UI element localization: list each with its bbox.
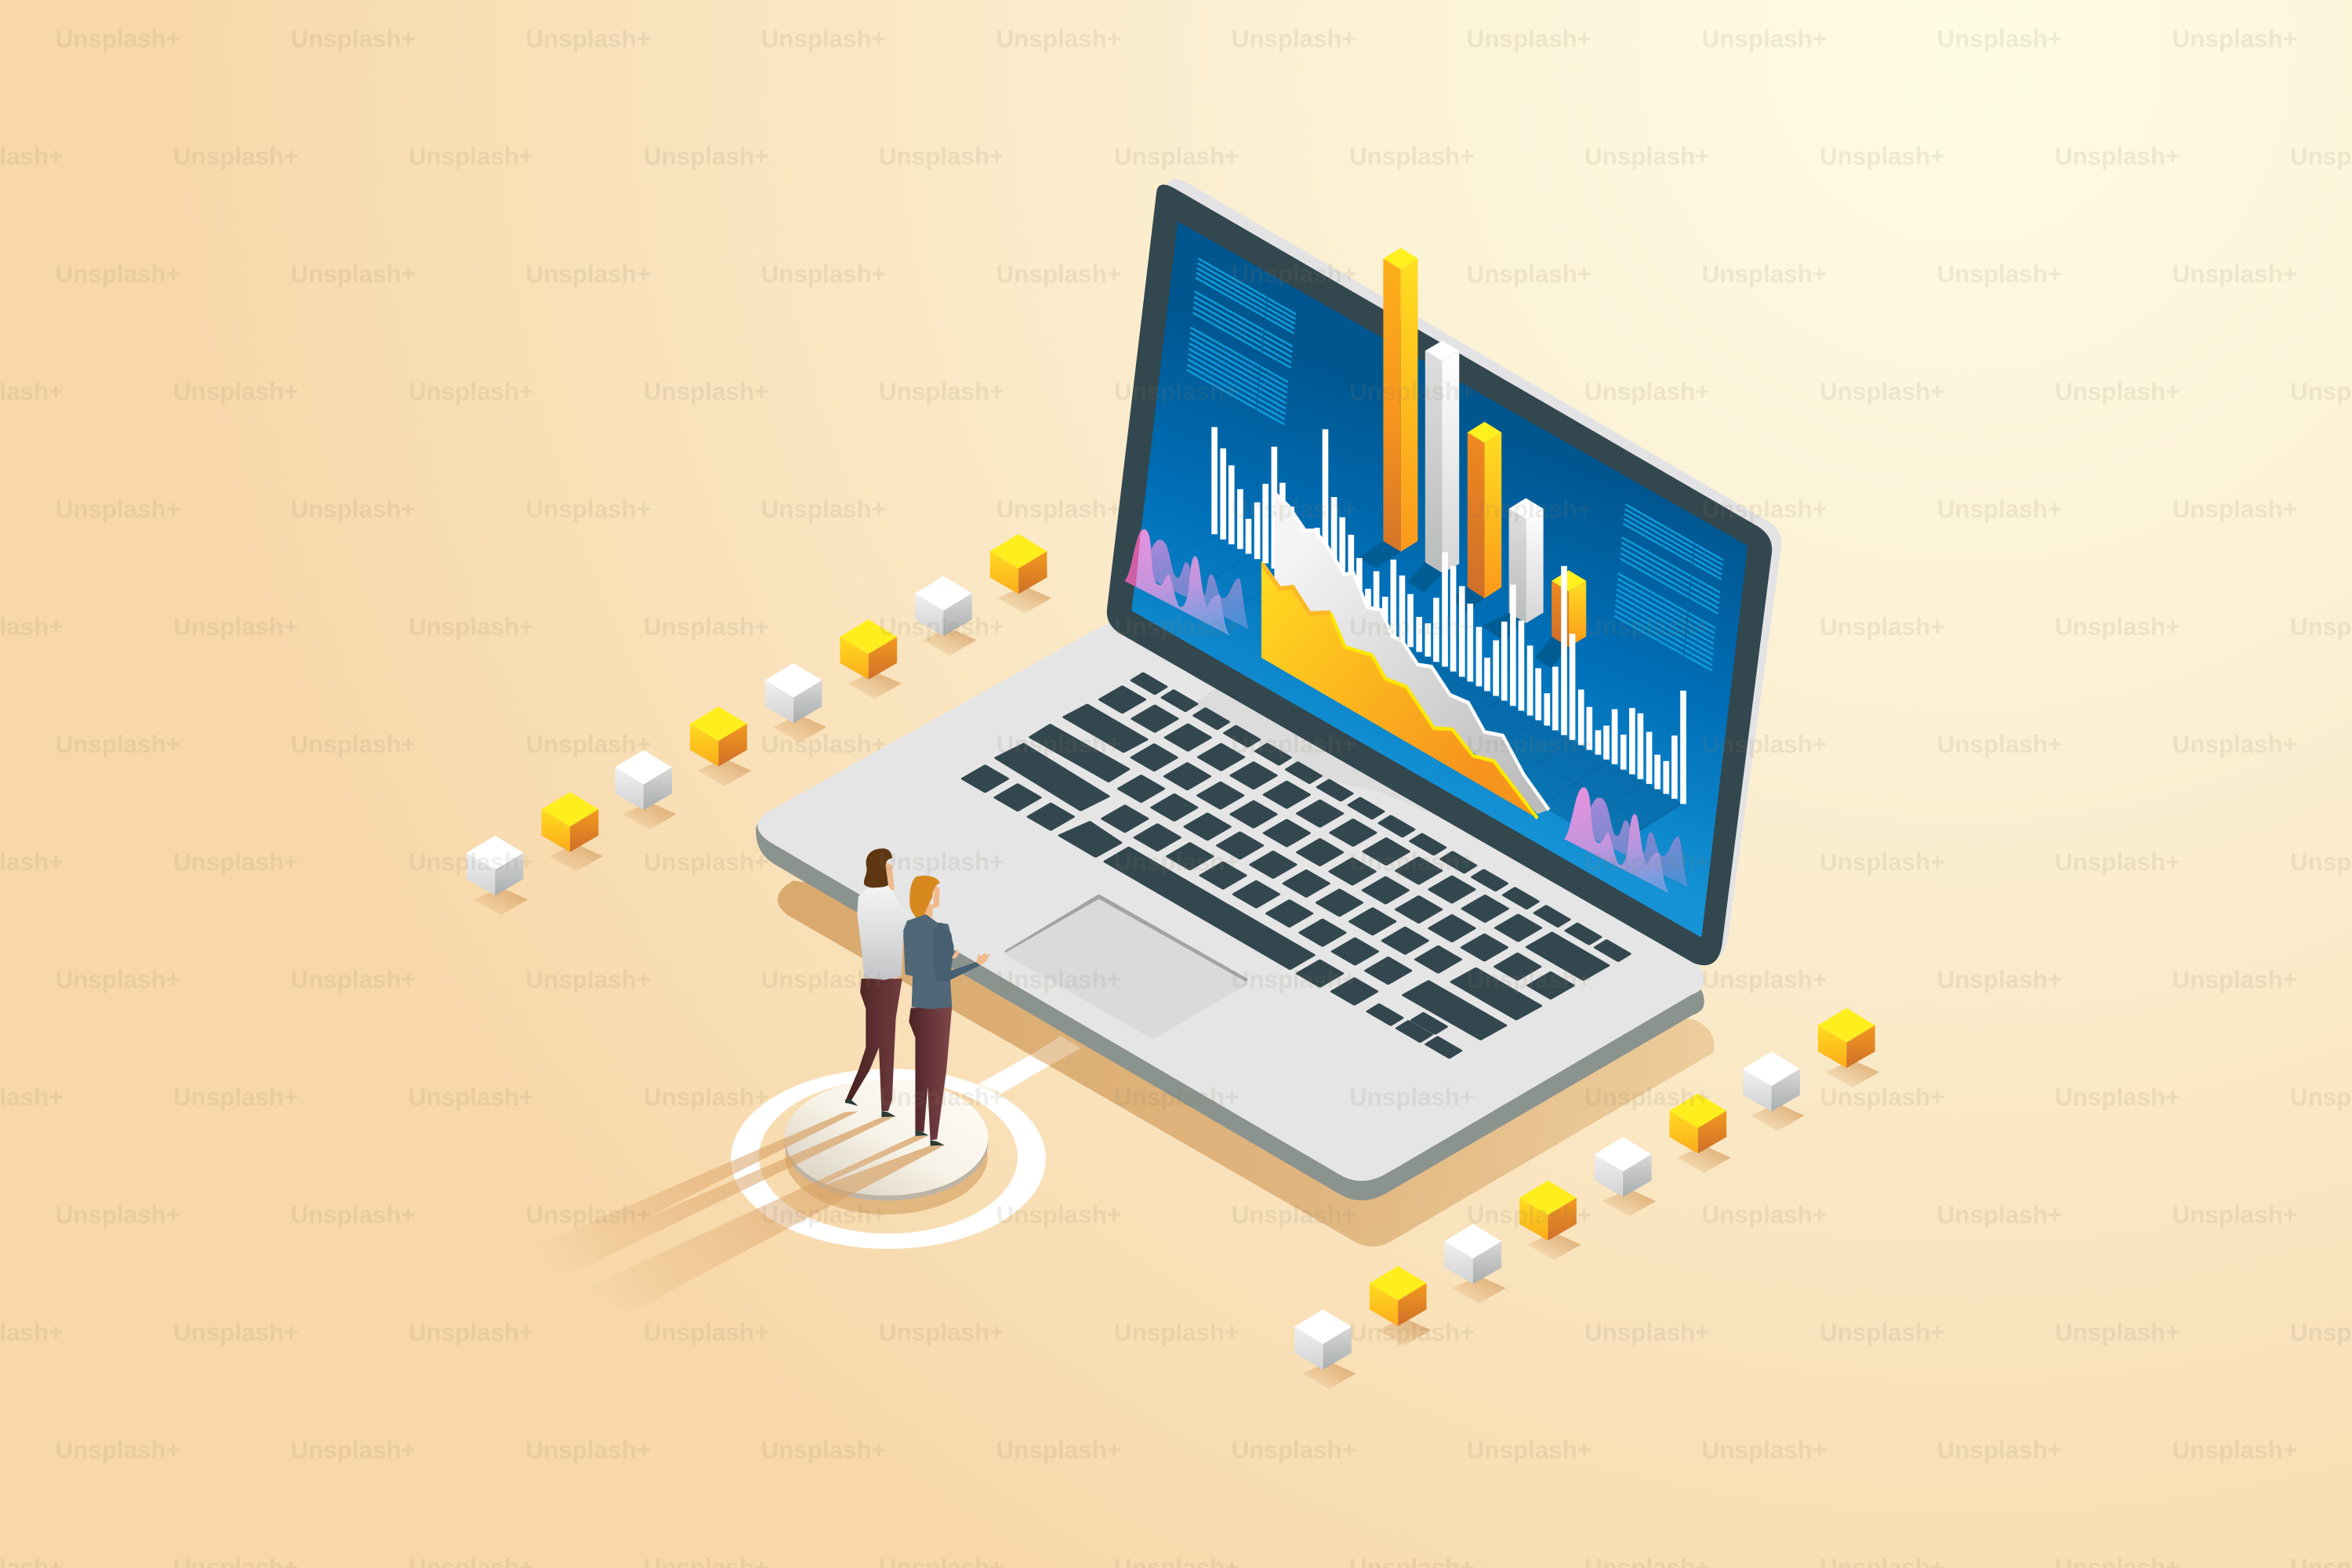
Unsplash+ watermark grid: Unsplash+ (2172, 495, 2297, 523)
Unsplash+ watermark grid: Unsplash+ (879, 143, 1004, 170)
Unsplash+ watermark grid: Unsplash+ (1937, 1201, 2062, 1229)
Unsplash+ watermark grid: Unsplash+ (2055, 1319, 2180, 1346)
Unsplash+ watermark grid: Unsplash+ (2055, 143, 2180, 170)
Unsplash+ watermark grid: Unsplash+ (1114, 1319, 1239, 1346)
Unsplash+ watermark grid: Unsplash+ (291, 731, 416, 758)
Unsplash+ watermark grid: Unsplash+ (1467, 731, 1592, 758)
Unsplash+ watermark grid: Unsplash+ (1584, 143, 1709, 170)
ring and podium base (506, 1036, 1081, 1312)
Unsplash+ watermark grid: Unsplash+ (996, 1201, 1121, 1229)
Unsplash+ watermark grid: Unsplash+ (644, 613, 768, 641)
Unsplash+ watermark grid: Unsplash+ (996, 966, 1121, 993)
Unsplash+ watermark grid: Unsplash+ (996, 1436, 1121, 1464)
white cube (1743, 1051, 1800, 1112)
Unsplash+ watermark grid: Unsplash+ (1467, 495, 1592, 523)
Unsplash+ watermark grid: Unsplash+ (1232, 25, 1356, 53)
Unsplash+ watermark grid: Unsplash+ (291, 495, 416, 523)
white cube (466, 836, 524, 895)
Unsplash+ watermark grid: Unsplash+ (879, 848, 1004, 876)
trackpad (1007, 896, 1245, 1037)
Unsplash+ watermark grid: Unsplash+ (1937, 495, 2062, 523)
Unsplash+ watermark grid: Unsplash+ (879, 1319, 1004, 1346)
Unsplash+ watermark grid: Unsplash+ (1114, 378, 1239, 405)
Unsplash+ watermark grid: Unsplash+ (1584, 1083, 1709, 1111)
Unsplash+ watermark grid: Unsplash+ (1937, 966, 2062, 993)
Unsplash+ watermark grid: Unsplash+ (408, 848, 533, 876)
screen panel and floor (1133, 223, 1747, 936)
Unsplash+ watermark grid: Unsplash+ (1349, 143, 1474, 170)
3D orange bar 1 (1383, 248, 1417, 552)
text lines top left of screen (1187, 259, 1296, 424)
Unsplash+ watermark grid: Unsplash+ (1820, 613, 1944, 641)
Unsplash+ watermark grid: Unsplash+ (173, 1319, 298, 1346)
Unsplash+ watermark grid: Unsplash+ (2055, 848, 2180, 876)
white ring (731, 1069, 1046, 1249)
Unsplash+ watermark grid: Unsplash+ (644, 848, 768, 876)
grey area chart (1274, 493, 1549, 814)
Unsplash+ watermark grid: Unsplash+ (526, 260, 651, 288)
Unsplash+ watermark grid: Unsplash+ (1937, 1436, 2062, 1464)
Unsplash+ watermark grid: Unsplash+ (173, 143, 298, 170)
Unsplash+ watermark grid: Unsplash+ (1702, 1201, 1827, 1229)
screen content (1187, 248, 1723, 818)
chart floor grid (1145, 534, 1683, 848)
Unsplash+ watermark grid: Unsplash+ (1937, 260, 2062, 288)
Unsplash+ watermark grid: Unsplash+ (1232, 495, 1356, 523)
gold cube (840, 619, 897, 680)
area wave chart left (1124, 529, 1249, 636)
white cube (915, 576, 972, 636)
Unsplash+ watermark grid: Unsplash+ (1937, 731, 2062, 758)
Unsplash+ watermark grid: Unsplash+ (1584, 848, 1709, 876)
Unsplash+ watermark grid: Unsplash+ (879, 378, 1004, 405)
gold cube (690, 706, 747, 767)
podium ground shadow (785, 1098, 988, 1214)
Unsplash+ watermark grid: Unsplash+ (1584, 1319, 1709, 1346)
Unsplash+ watermark grid: Unsplash+ (644, 1083, 768, 1111)
Unsplash+ watermark grid: Unsplash+ (1467, 260, 1592, 288)
screen panel (1133, 223, 1747, 936)
Unsplash+ watermark grid: Unsplash+ (996, 25, 1121, 53)
gold cube (1669, 1094, 1726, 1153)
Unsplash+ watermark grid: Unsplash+ (1467, 966, 1592, 993)
podium side (785, 1085, 988, 1201)
gold cube (1370, 1266, 1427, 1326)
Unsplash+ watermark grid: Unsplash+ (761, 1436, 886, 1464)
Unsplash+ watermark grid: Unsplash+ (1114, 143, 1239, 170)
Unsplash+ watermark grid: Unsplash+ (1349, 378, 1474, 405)
key row: second row (996, 744, 1505, 1039)
Unsplash+ watermark grid: Unsplash+ (1584, 378, 1709, 405)
gold cube (990, 534, 1047, 594)
laptop base side edge (756, 644, 1704, 1200)
Unsplash+ watermark grid: Unsplash+ (761, 1201, 886, 1229)
Unsplash+ watermark grid: Unsplash+ (996, 731, 1121, 758)
Unsplash+ watermark grid: Unsplash+ (408, 1083, 533, 1111)
Unsplash+ watermark grid: Unsplash+ (761, 731, 886, 758)
Unsplash+ watermark grid: Unsplash+ (1232, 1201, 1356, 1229)
Unsplash+ watermark grid: Unsplash+ (526, 25, 651, 53)
Unsplash+ watermark grid: Unsplash+ (1820, 143, 1944, 170)
gold cube (1818, 1008, 1875, 1068)
Unsplash+ watermark grid: Unsplash+ (56, 495, 180, 523)
laptop lid back edge (1164, 179, 1781, 961)
Unsplash+ watermark grid: Unsplash+ (996, 260, 1121, 288)
Unsplash+ watermark grid: Unsplash+ (1702, 25, 1827, 53)
Unsplash+ watermark grid: Unsplash+ (291, 966, 416, 993)
Unsplash+ watermark grid: Unsplash+ (1702, 731, 1827, 758)
white cube (1595, 1137, 1652, 1197)
Unsplash+ watermark grid: Unsplash+ (1114, 848, 1239, 876)
Unsplash+ watermark grid: Unsplash+ (408, 613, 533, 641)
area wave chart right (1564, 787, 1688, 894)
Unsplash+ watermark grid: Unsplash+ (761, 966, 886, 993)
Unsplash+ watermark grid: Unsplash+ (2172, 1201, 2297, 1229)
Unsplash+ watermark grid: Unsplash+ (1820, 1083, 1944, 1111)
Unsplash+ watermark grid: Unsplash+ (761, 260, 886, 288)
two women standing on podium (845, 848, 990, 1145)
Unsplash+ watermark grid: Unsplash+ (408, 378, 533, 405)
cube shadows left (474, 586, 1051, 915)
key row: function keys (1132, 673, 1629, 960)
Unsplash+ watermark grid: Unsplash+ (2055, 378, 2180, 405)
Unsplash+ watermark grid: Unsplash+ (526, 1436, 651, 1464)
key row: fourth row (1065, 705, 1573, 998)
3D orange bar 2 (1468, 422, 1501, 598)
yellow area chart (1261, 561, 1537, 818)
Unsplash+ watermark grid: Unsplash+ (1467, 1201, 1592, 1229)
Unsplash+ watermark grid: Unsplash+ (996, 495, 1121, 523)
woman in blue jacket (903, 876, 990, 1145)
laptop (756, 179, 1781, 1200)
Unsplash+ watermark grid: Unsplash+ (1349, 848, 1474, 876)
Unsplash+ watermark grid: Unsplash+ (173, 1083, 298, 1111)
Unsplash+ watermark grid: Unsplash+ (526, 1201, 651, 1229)
Unsplash+ watermark grid: Unsplash+ (291, 25, 416, 53)
Unsplash+ watermark grid: Unsplash+ (1467, 25, 1592, 53)
Unsplash+ watermark grid: Unsplash+ (761, 25, 886, 53)
Unsplash+ watermark grid: Unsplash+ (56, 260, 180, 288)
key row: fifth row (1100, 687, 1608, 979)
Unsplash+ watermark grid: Unsplash+ (291, 260, 416, 288)
long shadows of the people (506, 1112, 945, 1312)
Unsplash+ watermark grid: Unsplash+ (526, 495, 651, 523)
Unsplash+ watermark grid: Unsplash+ (526, 731, 651, 758)
Unsplash+ watermark grid: Unsplash+ (56, 731, 180, 758)
white cube (1444, 1224, 1501, 1284)
Unsplash+ watermark grid: Unsplash+ (761, 495, 886, 523)
Unsplash+ watermark grid: Unsplash+ (1232, 731, 1356, 758)
text lines top right of screen (1614, 504, 1723, 670)
Unsplash+ watermark grid: Unsplash+ (56, 1436, 180, 1464)
Unsplash+ watermark grid: Unsplash+ (1820, 1319, 1944, 1346)
gold cube (542, 792, 598, 852)
Unsplash+ watermark grid: Unsplash+ (1114, 613, 1239, 641)
Unsplash+ watermark grid: Unsplash+ (291, 1201, 416, 1229)
Unsplash+ watermark grid: Unsplash+ (56, 25, 180, 53)
Unsplash+ watermark grid: Unsplash+ (2172, 966, 2297, 993)
Unsplash+ watermark grid: Unsplash+ (2055, 613, 2180, 641)
white cube (615, 750, 672, 810)
key row: third row (1031, 725, 1541, 1019)
Unsplash+ watermark grid: Unsplash+ (2172, 1436, 2297, 1464)
cube shadows right (1302, 1060, 1879, 1389)
Unsplash+ watermark grid: Unsplash+ (408, 1319, 533, 1346)
3D white bar 1 (1425, 341, 1459, 573)
white cube (765, 663, 822, 723)
3D white bar 2 (1509, 498, 1544, 623)
Unsplash+ watermark grid: Unsplash+ (644, 378, 768, 405)
Unsplash+ watermark grid: Unsplash+ (2172, 25, 2297, 53)
white cube (1294, 1309, 1352, 1370)
Unsplash+ watermark grid: Unsplash+ (291, 1436, 416, 1464)
laptop lid bezel (1107, 184, 1772, 965)
Unsplash+ watermark grid: Unsplash+ (1820, 848, 1944, 876)
keyboard (963, 673, 1629, 1058)
Unsplash+ watermark grid: Unsplash+ (1467, 1436, 1592, 1464)
Unsplash+ watermark grid: Unsplash+ (2055, 1083, 2180, 1111)
Unsplash+ watermark grid: Unsplash+ (1820, 378, 1944, 405)
Unsplash+ watermark grid: Unsplash+ (1232, 966, 1356, 993)
Unsplash+ watermark grid: Unsplash+ (408, 143, 533, 170)
Unsplash+ watermark grid: Unsplash+ (879, 613, 1004, 641)
lid shadow on deck (1192, 667, 1536, 843)
laptop ground shadow (778, 880, 1714, 1247)
connector line from ring to laptop (978, 1036, 1081, 1094)
Unsplash+ watermark grid: Unsplash+ (2172, 731, 2297, 758)
Unsplash+ watermark grid: Unsplash+ (1349, 1319, 1474, 1346)
Unsplash+ watermark grid: Unsplash+ (1232, 1436, 1356, 1464)
Unsplash+ watermark grid: Unsplash+ (56, 966, 180, 993)
woman in white shirt (845, 848, 914, 1117)
Unsplash+ watermark grid: Unsplash+ (879, 1083, 1004, 1111)
Unsplash+ watermark grid: Unsplash+ (173, 613, 298, 641)
Unsplash+ watermark grid: Unsplash+ (1349, 613, 1474, 641)
cubes row left (466, 534, 1051, 915)
Unsplash+ watermark grid: Unsplash+ (1702, 966, 1827, 993)
Unsplash+ watermark grid: Unsplash+ (1114, 1083, 1239, 1111)
Unsplash+ watermark grid: Unsplash+ (1702, 1436, 1827, 1464)
cubes row right (1294, 1008, 1879, 1389)
Unsplash+ watermark grid: Unsplash+ (1584, 613, 1709, 641)
Unsplash+ watermark grid: Unsplash+ (1937, 25, 2062, 53)
Unsplash+ watermark grid: Unsplash+ (2172, 260, 2297, 288)
Unsplash+ watermark grid: Unsplash+ (644, 1319, 768, 1346)
Unsplash+ watermark grid: Unsplash+ (1702, 495, 1827, 523)
3D orange bar 3 (1552, 570, 1586, 647)
Unsplash+ watermark grid: Unsplash+ (173, 848, 298, 876)
Unsplash+ watermark grid: Unsplash+ (1232, 260, 1356, 288)
podium top (785, 1080, 988, 1196)
Unsplash+ watermark grid: Unsplash+ (644, 143, 768, 170)
laptop base top surface (757, 624, 1704, 1181)
Unsplash+ watermark grid: Unsplash+ (1349, 1083, 1474, 1111)
bar floor shadows (1358, 541, 1569, 668)
gold cube (1519, 1181, 1577, 1240)
key row: bottom row with space bar (963, 766, 1461, 1058)
Unsplash+ watermark grid: Unsplash+ (526, 966, 651, 993)
Unsplash+ watermark grid: Unsplash+ (56, 1201, 180, 1229)
white bar chart (1214, 427, 1683, 804)
Unsplash+ watermark grid: Unsplash+ (1702, 260, 1827, 288)
Unsplash+ watermark grid: Unsplash+ (173, 378, 298, 405)
